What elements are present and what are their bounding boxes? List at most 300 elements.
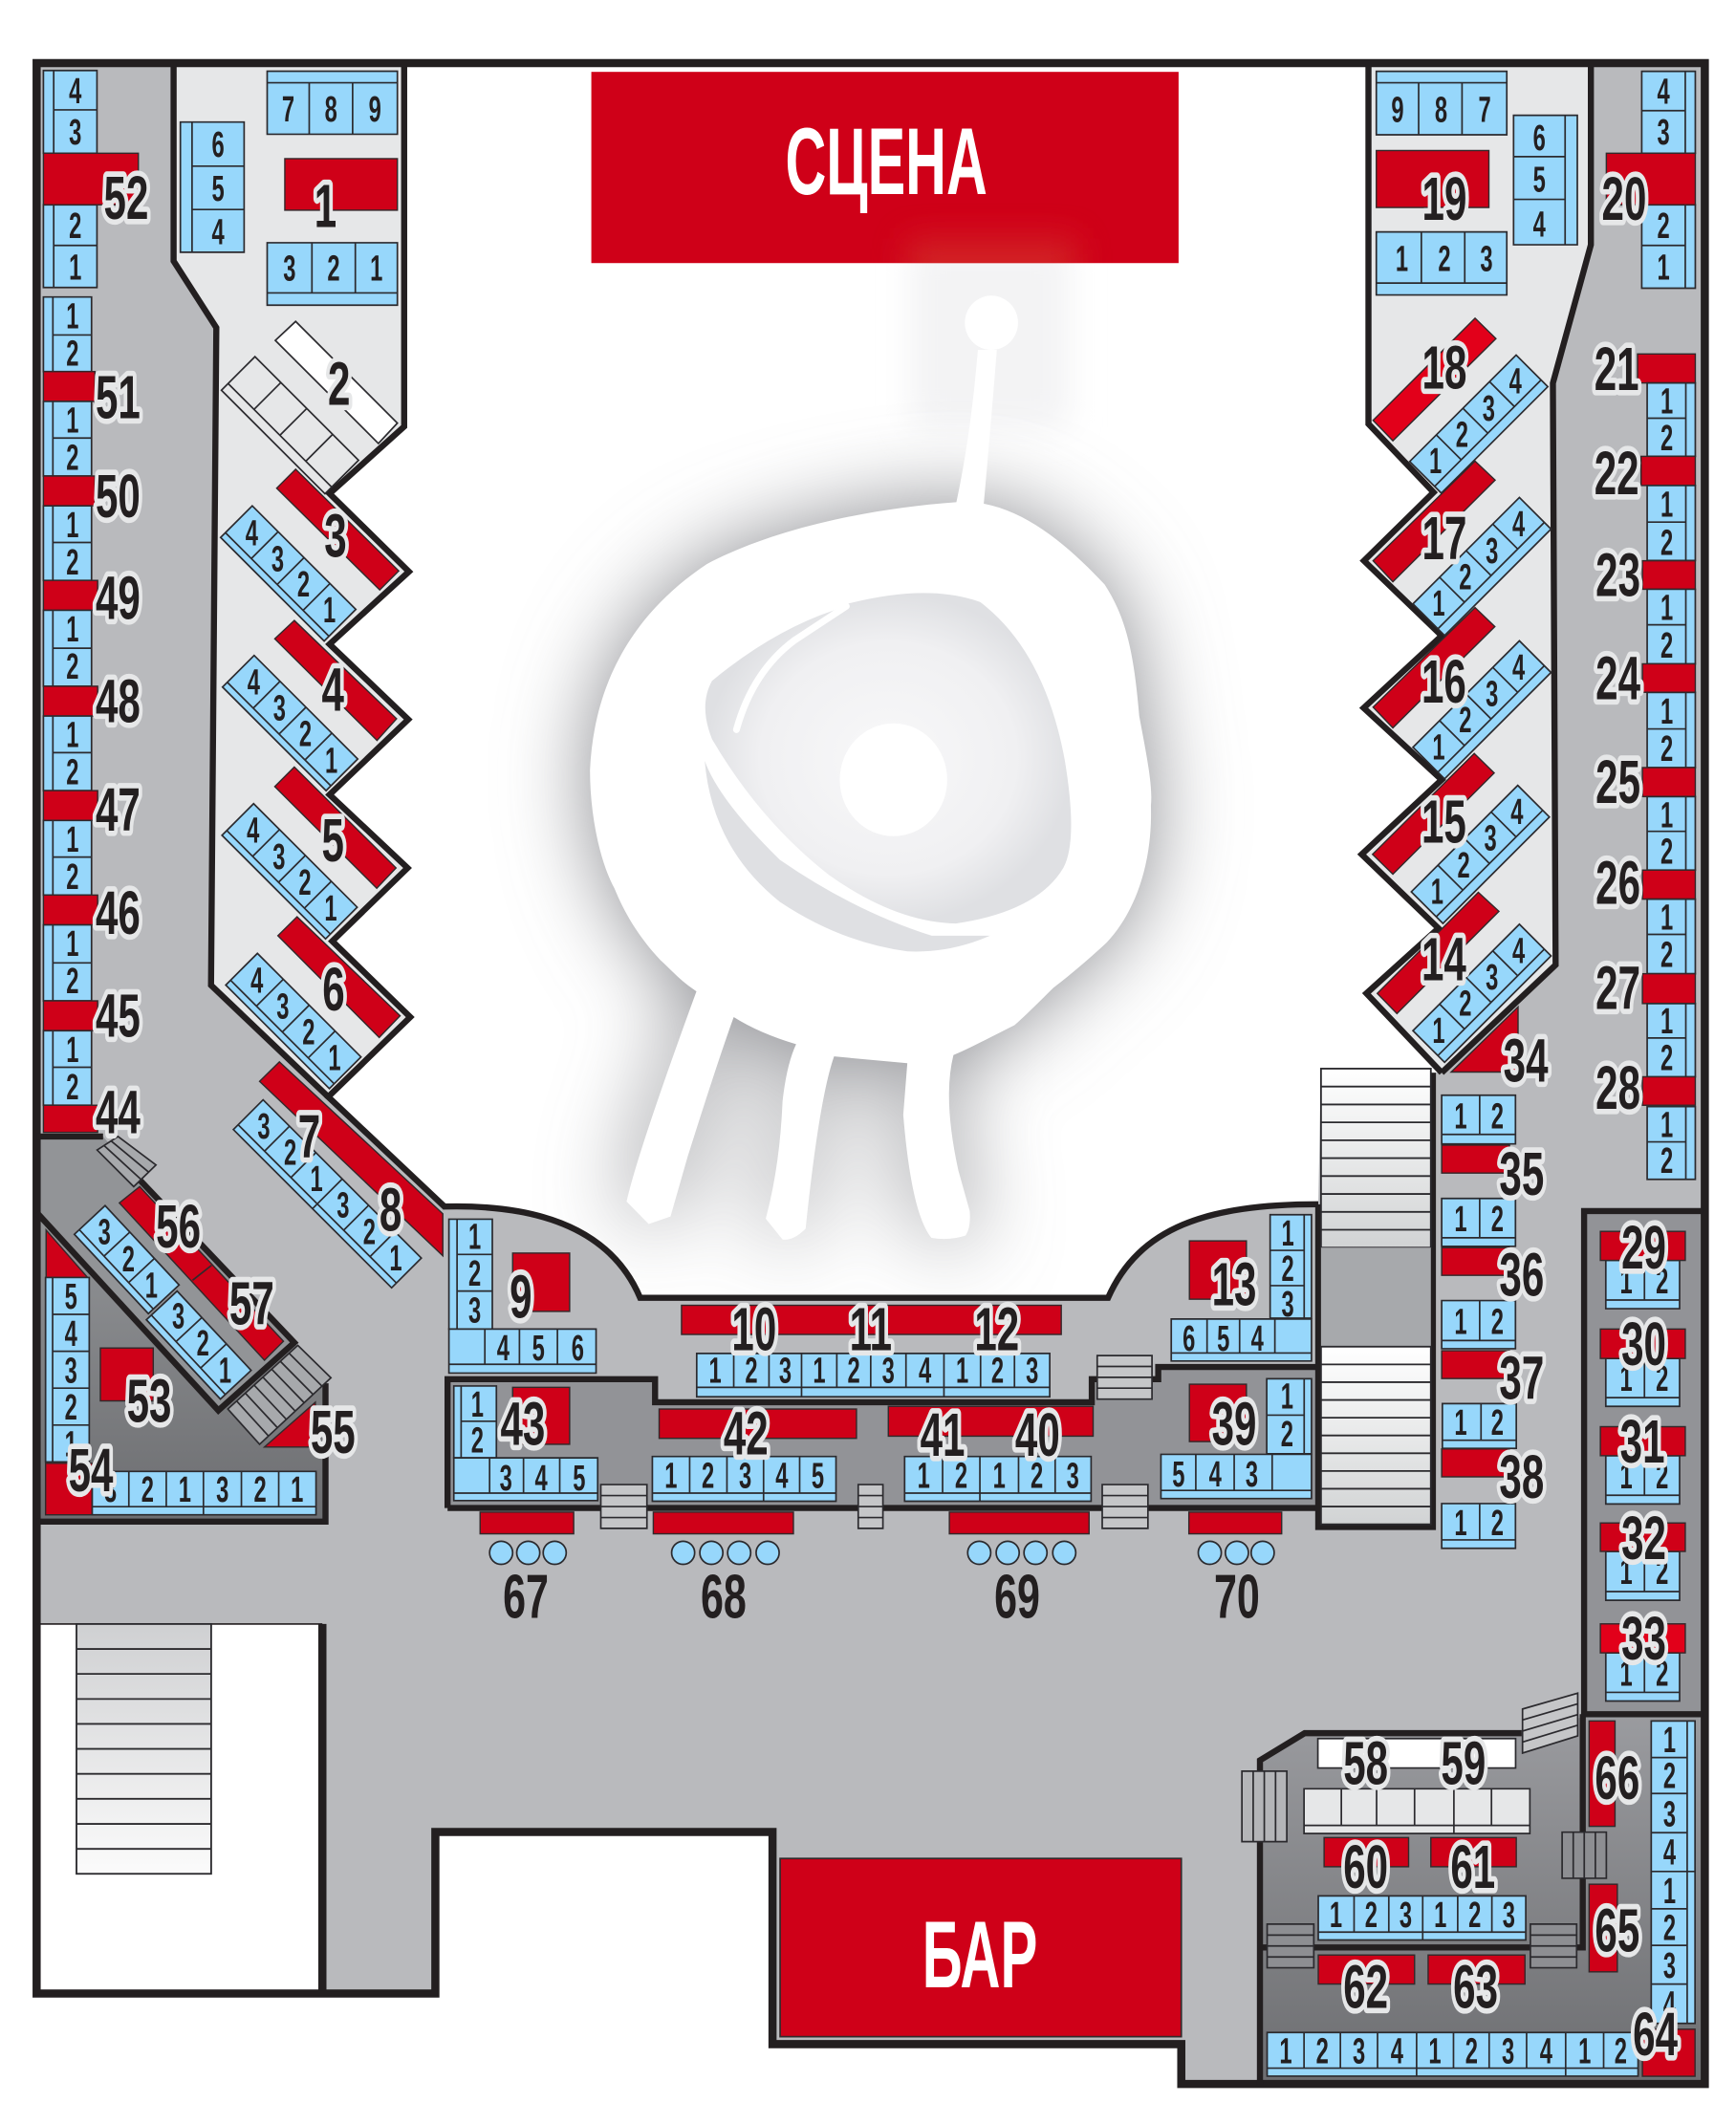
table group 10 to 12: 4 <box>919 1350 931 1391</box>
table group 17 <box>1373 461 1552 636</box>
table number labels: 49 <box>96 565 141 633</box>
table group 35 to 38: 2 <box>1491 1502 1504 1543</box>
table group 20 <box>1606 71 1695 288</box>
table number labels: 25 <box>1595 748 1640 816</box>
table group 64 bottom row: 1 <box>1578 2030 1591 2071</box>
room: left balcony <box>174 63 410 1096</box>
table column 44 to 51: 2 <box>66 541 79 582</box>
table group 62 and 63 <box>1318 1955 1525 1984</box>
table number labels: 3 <box>324 503 347 571</box>
table group 53: 3 <box>65 1350 77 1391</box>
table group 39: 1 <box>1281 1375 1293 1417</box>
table group 19: 8 <box>1435 89 1447 130</box>
table group 64 bottom row <box>1268 2029 1695 2076</box>
table number labels: 9 <box>510 1264 532 1331</box>
table group 42: 2 <box>702 1454 714 1496</box>
table number labels: 2 <box>328 351 350 419</box>
table group 1: 8 <box>325 88 337 129</box>
table group 35 to 38 <box>1442 1095 1516 1549</box>
table group 9: 4 <box>497 1327 510 1368</box>
table column 21 to 28: 2 <box>1660 521 1673 563</box>
table group 14: 1 <box>1432 1009 1445 1051</box>
table group 43: 3 <box>500 1457 512 1499</box>
table number labels: 4 <box>321 657 344 725</box>
table group 43: 5 <box>573 1457 585 1499</box>
table group 60 and 61: 2 <box>1365 1894 1378 1935</box>
table group 64 right column: 3 <box>1663 1944 1676 1986</box>
standing tables 67 <box>480 1512 574 1564</box>
table column 21 to 28: 1 <box>1660 1104 1673 1145</box>
table number labels: 35 <box>1499 1140 1544 1208</box>
table group 4: 2 <box>299 712 312 754</box>
table group 32 <box>1600 1523 1685 1600</box>
table group 4: 3 <box>273 686 286 728</box>
table number labels: 5 <box>321 807 344 875</box>
table number labels: 31 <box>1620 1408 1665 1476</box>
table number labels: 1 <box>315 173 336 241</box>
table column 21 to 28: 1 <box>1660 794 1673 835</box>
table group 32: 1 <box>1619 1550 1633 1592</box>
table group 54: 1 <box>291 1468 303 1510</box>
table column 44 to 51: 1 <box>66 818 79 859</box>
table group 17: 3 <box>1486 530 1498 571</box>
table column 21 to 28: 2 <box>1660 934 1673 975</box>
table group 5: 3 <box>272 835 285 877</box>
table column 21 to 28: 1 <box>1660 484 1673 525</box>
room: right balcony <box>1361 63 1591 1073</box>
table group 19 <box>1377 72 1577 295</box>
table column 44 to 51: 1 <box>66 1029 79 1070</box>
table group 43 <box>454 1383 597 1501</box>
table group 5: 1 <box>324 887 337 928</box>
numbers 67 to 70: 69 <box>994 1562 1040 1632</box>
table group 7 and 8: 2 <box>363 1210 376 1252</box>
table group 13: 5 <box>1217 1317 1229 1358</box>
table group 33 <box>1600 1624 1685 1701</box>
table group 16: 1 <box>1432 726 1445 768</box>
table group 39: 4 <box>1209 1453 1222 1494</box>
table 34 <box>1451 1007 1518 1072</box>
table group 64 bottom row: 1 <box>1428 2030 1442 2071</box>
table number labels: 7 <box>298 1103 320 1171</box>
table group 35 to 38: 2 <box>1491 1300 1504 1342</box>
table group 7 and 8 <box>233 1062 443 1288</box>
table number labels: 51 <box>96 364 141 432</box>
table group 6 <box>226 917 401 1089</box>
table group 52 <box>43 70 139 288</box>
table group 56 and 57: 2 <box>197 1322 209 1363</box>
table group 19: 6 <box>1533 117 1546 158</box>
table group 5: 2 <box>298 861 312 902</box>
table column 44 to 51: 2 <box>66 437 79 478</box>
bar <box>780 1858 1182 2037</box>
table group 10 to 12: 3 <box>779 1350 792 1391</box>
room: lower left lounge <box>36 1137 326 1522</box>
table number labels: 20 <box>1602 165 1646 233</box>
table group 9: 6 <box>572 1327 584 1368</box>
table group 53: 1 <box>65 1423 77 1464</box>
table group 56 and 57: 1 <box>219 1350 231 1391</box>
table group 35 to 38: 2 <box>1491 1401 1504 1442</box>
table number labels: 61 <box>1450 1833 1495 1901</box>
numbers 67 to 70: 70 <box>1214 1562 1260 1632</box>
room: tables 39 to 43 <box>447 1367 1318 1506</box>
table group 3: 1 <box>323 589 336 631</box>
table number labels: 6 <box>322 956 345 1024</box>
table number labels: 42 <box>724 1400 769 1468</box>
table group 19: 7 <box>1479 89 1491 130</box>
table group 17: 2 <box>1459 556 1471 597</box>
table group 4 <box>223 620 397 791</box>
table number labels: 8 <box>380 1177 401 1245</box>
table group 33: 2 <box>1656 1653 1668 1694</box>
table column 44 to 51: 1 <box>66 714 79 755</box>
table number labels: 12 <box>974 1296 1019 1363</box>
table group 60 and 61: 1 <box>1434 1894 1446 1935</box>
table group 10 to 12: 2 <box>991 1350 1004 1391</box>
table group 17: 4 <box>1512 503 1525 544</box>
table group 10 to 12: 1 <box>813 1350 826 1391</box>
table group 52: 4 <box>69 70 82 111</box>
table column 21 to 28: 1 <box>1660 690 1673 731</box>
table group 5 <box>222 767 396 939</box>
table group 1: 5 <box>212 167 225 208</box>
table group 7 and 8: 3 <box>336 1184 349 1225</box>
table group 64 bottom row: 3 <box>1502 2030 1514 2071</box>
table number labels: 23 <box>1595 542 1640 610</box>
table group 42: 4 <box>775 1454 789 1496</box>
table group 35 to 38: 1 <box>1454 1300 1467 1342</box>
table group 60 and 61 <box>1318 1837 1526 1940</box>
table number labels: 22 <box>1595 440 1639 508</box>
table group 64 bottom row: 2 <box>1316 2030 1329 2071</box>
table group 14: 3 <box>1486 956 1498 998</box>
room: tables 58 to 66 <box>1260 1717 1703 2083</box>
staircase: landing <box>1321 1247 1431 1347</box>
table group 6: 2 <box>302 1011 315 1052</box>
table group 29 <box>1600 1231 1685 1309</box>
table group 15: 2 <box>1458 844 1470 885</box>
table column 44 to 51: 1 <box>66 504 79 545</box>
table number labels: 13 <box>1212 1251 1256 1319</box>
table group 15: 4 <box>1510 791 1524 832</box>
table number labels: 66 <box>1595 1745 1639 1812</box>
table group 20: 4 <box>1657 71 1670 112</box>
steps: inner 66 <box>1562 1832 1606 1878</box>
table number labels: 65 <box>1595 1897 1639 1965</box>
table number labels: 41 <box>921 1401 965 1469</box>
table number labels: 53 <box>127 1368 171 1436</box>
table group 33: 1 <box>1619 1653 1633 1694</box>
table number labels: 37 <box>1499 1345 1544 1413</box>
table group 64 right column: 1 <box>1663 1719 1676 1760</box>
table group 10 to 12 <box>682 1306 1061 1397</box>
table group 53 <box>46 1230 153 1464</box>
table group 18: 1 <box>1429 440 1442 482</box>
table group 16 <box>1373 608 1552 779</box>
table group 35 to 38: 1 <box>1454 1095 1467 1137</box>
table group 3 <box>221 469 399 641</box>
standing tables 70 <box>1189 1512 1282 1564</box>
table column 21 to 28: 1 <box>1660 897 1673 938</box>
table number labels: 32 <box>1621 1505 1666 1572</box>
table group 19: 1 <box>1396 238 1408 279</box>
steps: left of 58 <box>1242 1771 1287 1842</box>
table group 4: 1 <box>325 740 337 781</box>
table group 9: 5 <box>532 1327 545 1368</box>
table group 9: 3 <box>468 1289 481 1331</box>
table group 53: 5 <box>65 1275 77 1316</box>
table group 39: 2 <box>1281 1413 1293 1454</box>
table group 30 <box>1600 1329 1685 1406</box>
table group 35 to 38: 1 <box>1454 1198 1467 1240</box>
table group 9 <box>449 1216 597 1373</box>
table group 64 bottom row: 4 <box>1391 2030 1403 2071</box>
table group 64 right column: 2 <box>1663 1907 1676 1948</box>
table group 15 <box>1373 753 1550 923</box>
table group 52: 3 <box>69 111 81 153</box>
steps: near 44 <box>98 1137 156 1186</box>
table group 40 and 41: 1 <box>918 1454 930 1496</box>
table group 3: 2 <box>297 563 310 605</box>
steps: near 55 <box>228 1345 331 1444</box>
table group 9: 1 <box>468 1216 481 1257</box>
table group 40 and 41 <box>888 1406 1094 1502</box>
table group 54 <box>46 1463 316 1515</box>
table group 58 and 59 <box>1304 1739 1530 1833</box>
bar: БАР <box>922 1902 1037 2008</box>
table number labels: 14 <box>1421 926 1466 994</box>
table column 21 to 28: 2 <box>1660 1037 1673 1078</box>
table group 54: 2 <box>141 1468 154 1510</box>
steps: right top <box>1523 1693 1577 1753</box>
table number labels: 44 <box>96 1079 141 1147</box>
stage <box>591 72 1179 264</box>
table group 64 right column <box>1651 1719 1695 2025</box>
table group 1: 9 <box>369 88 381 129</box>
table 65 <box>1589 1884 1617 1972</box>
table column 21 to 28: 2 <box>1660 727 1673 769</box>
table group 40 and 41: 2 <box>955 1454 967 1496</box>
table group 64 bottom row: 3 <box>1353 2030 1365 2071</box>
table number labels: 28 <box>1595 1054 1640 1122</box>
table number labels: 45 <box>96 983 141 1051</box>
table group 20: 3 <box>1657 111 1670 153</box>
table group 54: 1 <box>179 1468 191 1510</box>
staircase: upper flight <box>1321 1069 1431 1247</box>
table group 64 bottom row: 4 <box>1540 2030 1552 2071</box>
table group 31: 1 <box>1619 1455 1633 1496</box>
table group 19: 4 <box>1533 204 1546 245</box>
table number labels: 60 <box>1343 1833 1388 1901</box>
table group 32: 2 <box>1656 1550 1668 1592</box>
table group 10 to 12: 2 <box>745 1350 758 1391</box>
table group 53: 4 <box>65 1312 77 1354</box>
table number labels: 46 <box>96 879 141 947</box>
table group 15: 3 <box>1484 817 1497 858</box>
table group 54: 2 <box>254 1468 267 1510</box>
table group 19: 3 <box>1480 238 1493 279</box>
table group 56 and 57 <box>75 1186 284 1399</box>
table group 13: 3 <box>1282 1283 1294 1324</box>
numbers 67 to 70: 67 <box>503 1562 549 1632</box>
standing tables 68 <box>653 1512 793 1565</box>
table group 43: 4 <box>534 1457 548 1499</box>
numbers 67 to 70: 68 <box>701 1562 747 1632</box>
table group 64 right column: 1 <box>1663 1870 1676 1912</box>
table 66 <box>1589 1721 1615 1827</box>
table group 7 and 8: 2 <box>284 1132 296 1173</box>
table group 19: 5 <box>1533 159 1546 200</box>
table group 16: 2 <box>1459 699 1471 741</box>
table column 44 to 51: 2 <box>66 751 79 792</box>
table group 7 and 8: 3 <box>257 1105 271 1146</box>
table group 16: 3 <box>1486 673 1498 714</box>
table group 1: 3 <box>283 248 296 289</box>
table group 18: 4 <box>1509 360 1522 401</box>
steps: bottom right <box>1530 1924 1576 1968</box>
table number labels: 54 <box>69 1437 113 1505</box>
table column 44 to 51: 2 <box>66 1066 79 1107</box>
table number labels: 15 <box>1421 789 1466 856</box>
table column 44 to 51: 2 <box>66 332 79 374</box>
table group 42: 1 <box>664 1454 677 1496</box>
table number labels: 63 <box>1453 1954 1498 2022</box>
table group 5: 4 <box>247 810 260 851</box>
table group 1 <box>181 71 398 305</box>
table column 44 to 51 <box>43 294 98 1133</box>
table group 29: 1 <box>1619 1260 1633 1301</box>
table group 20: 2 <box>1657 205 1670 246</box>
table group 43: 1 <box>471 1383 484 1424</box>
table group 14: 2 <box>1459 983 1471 1024</box>
table group 10 to 12: 2 <box>848 1350 860 1391</box>
table number labels: 10 <box>731 1296 776 1363</box>
table number labels: 43 <box>500 1391 545 1459</box>
table number labels: 24 <box>1595 645 1640 713</box>
table group 31: 2 <box>1656 1455 1668 1496</box>
table column 44 to 51: 2 <box>66 645 79 686</box>
table group 1: 6 <box>212 123 225 164</box>
table group 60 and 61: 1 <box>1330 1894 1342 1935</box>
steps: 443 <box>601 1485 647 1528</box>
table column 44 to 51: 2 <box>66 960 79 1002</box>
table number labels: 59 <box>1441 1730 1486 1797</box>
table group 39: 3 <box>1246 1453 1258 1494</box>
table group 35 to 38: 2 <box>1491 1198 1504 1240</box>
table number labels: 17 <box>1422 506 1466 573</box>
table number labels: 26 <box>1595 850 1640 918</box>
table group 53: 2 <box>65 1386 77 1427</box>
table group 18: 2 <box>1456 414 1468 455</box>
table group 56 and 57: 3 <box>98 1211 111 1252</box>
table number labels: 27 <box>1595 955 1640 1023</box>
table group 17: 1 <box>1432 582 1445 624</box>
table column 21 to 28: 1 <box>1660 586 1673 628</box>
table group 19: 2 <box>1438 238 1451 279</box>
table column 44 to 51: 1 <box>66 608 79 649</box>
table column 44 to 51: 1 <box>66 922 79 964</box>
table group 1: 2 <box>327 248 340 289</box>
table number labels: 58 <box>1343 1730 1388 1797</box>
steps: 809 upper <box>1097 1355 1152 1399</box>
table number labels: 47 <box>96 776 141 844</box>
table group 9: 2 <box>468 1252 481 1293</box>
table group 3: 4 <box>246 511 258 553</box>
table column 44 to 51: 1 <box>66 400 79 441</box>
table group 6: 3 <box>276 986 289 1027</box>
table number labels: 62 <box>1343 1954 1388 2022</box>
table group 42 <box>652 1409 857 1502</box>
table number labels: 34 <box>1504 1028 1549 1095</box>
table group 40 and 41: 3 <box>1067 1454 1079 1496</box>
steps: 633 <box>858 1485 883 1528</box>
table column 21 to 28: 2 <box>1660 417 1673 458</box>
table group 35 to 38: 1 <box>1454 1401 1467 1442</box>
table number labels: 33 <box>1621 1605 1666 1673</box>
table group 64 right column: 3 <box>1663 1792 1676 1834</box>
table group 64 bottom row: 1 <box>1279 2030 1292 2071</box>
table group 56 and 57: 1 <box>145 1265 158 1306</box>
table number labels: 50 <box>96 464 141 531</box>
steps: 812 <box>1102 1485 1148 1528</box>
table group 14 <box>1378 893 1552 1062</box>
steps: bottom left <box>1268 1924 1313 1968</box>
table number labels: 11 <box>850 1296 892 1363</box>
table group 56 and 57: 2 <box>122 1238 135 1279</box>
table column 21 to 28: 2 <box>1660 1139 1673 1181</box>
table number labels: 21 <box>1595 336 1639 403</box>
table group 13: 2 <box>1282 1247 1294 1289</box>
table group 18 <box>1373 318 1548 493</box>
table group 64 bottom row: 2 <box>1615 2030 1627 2071</box>
table number labels: 36 <box>1499 1242 1544 1310</box>
table group 30: 1 <box>1619 1357 1633 1398</box>
stage: СЦЕНА <box>785 109 987 215</box>
table number labels: 52 <box>104 164 148 232</box>
table number labels: 16 <box>1421 648 1466 716</box>
table group 6: 4 <box>250 960 264 1001</box>
table column 21 to 28: 2 <box>1660 624 1673 665</box>
table number labels: 30 <box>1621 1311 1666 1378</box>
table group 10 to 12: 1 <box>709 1350 722 1391</box>
table number labels: 39 <box>1212 1391 1256 1459</box>
table group 35 to 38: 1 <box>1454 1502 1467 1543</box>
table 55 <box>265 1402 315 1447</box>
table group 6: 1 <box>328 1037 341 1078</box>
watermark: alien logo <box>590 244 1151 1240</box>
table group 19: 9 <box>1391 89 1404 130</box>
table group 40 and 41: 2 <box>1031 1454 1043 1496</box>
table group 13: 1 <box>1282 1212 1294 1254</box>
staircase: lower flight <box>1321 1347 1431 1525</box>
table group 64 bottom row: 2 <box>1465 2030 1478 2071</box>
table group 13: 6 <box>1183 1317 1195 1358</box>
table group 10 to 12: 3 <box>882 1350 895 1391</box>
table column 21 to 28: 2 <box>1660 831 1673 872</box>
table column 21 to 28 <box>1638 354 1695 1181</box>
table group 39: 5 <box>1172 1453 1184 1494</box>
table group 42: 3 <box>739 1454 751 1496</box>
table group 42: 5 <box>812 1454 824 1496</box>
table group 29: 2 <box>1656 1260 1668 1301</box>
table group 7 and 8: 1 <box>311 1158 323 1199</box>
table group 64 right column: 4 <box>1663 1983 1676 2025</box>
table group 54: 3 <box>104 1468 117 1510</box>
table group 54: 3 <box>216 1468 228 1510</box>
table group 39 <box>1161 1375 1312 1499</box>
table group 14: 4 <box>1512 929 1525 971</box>
